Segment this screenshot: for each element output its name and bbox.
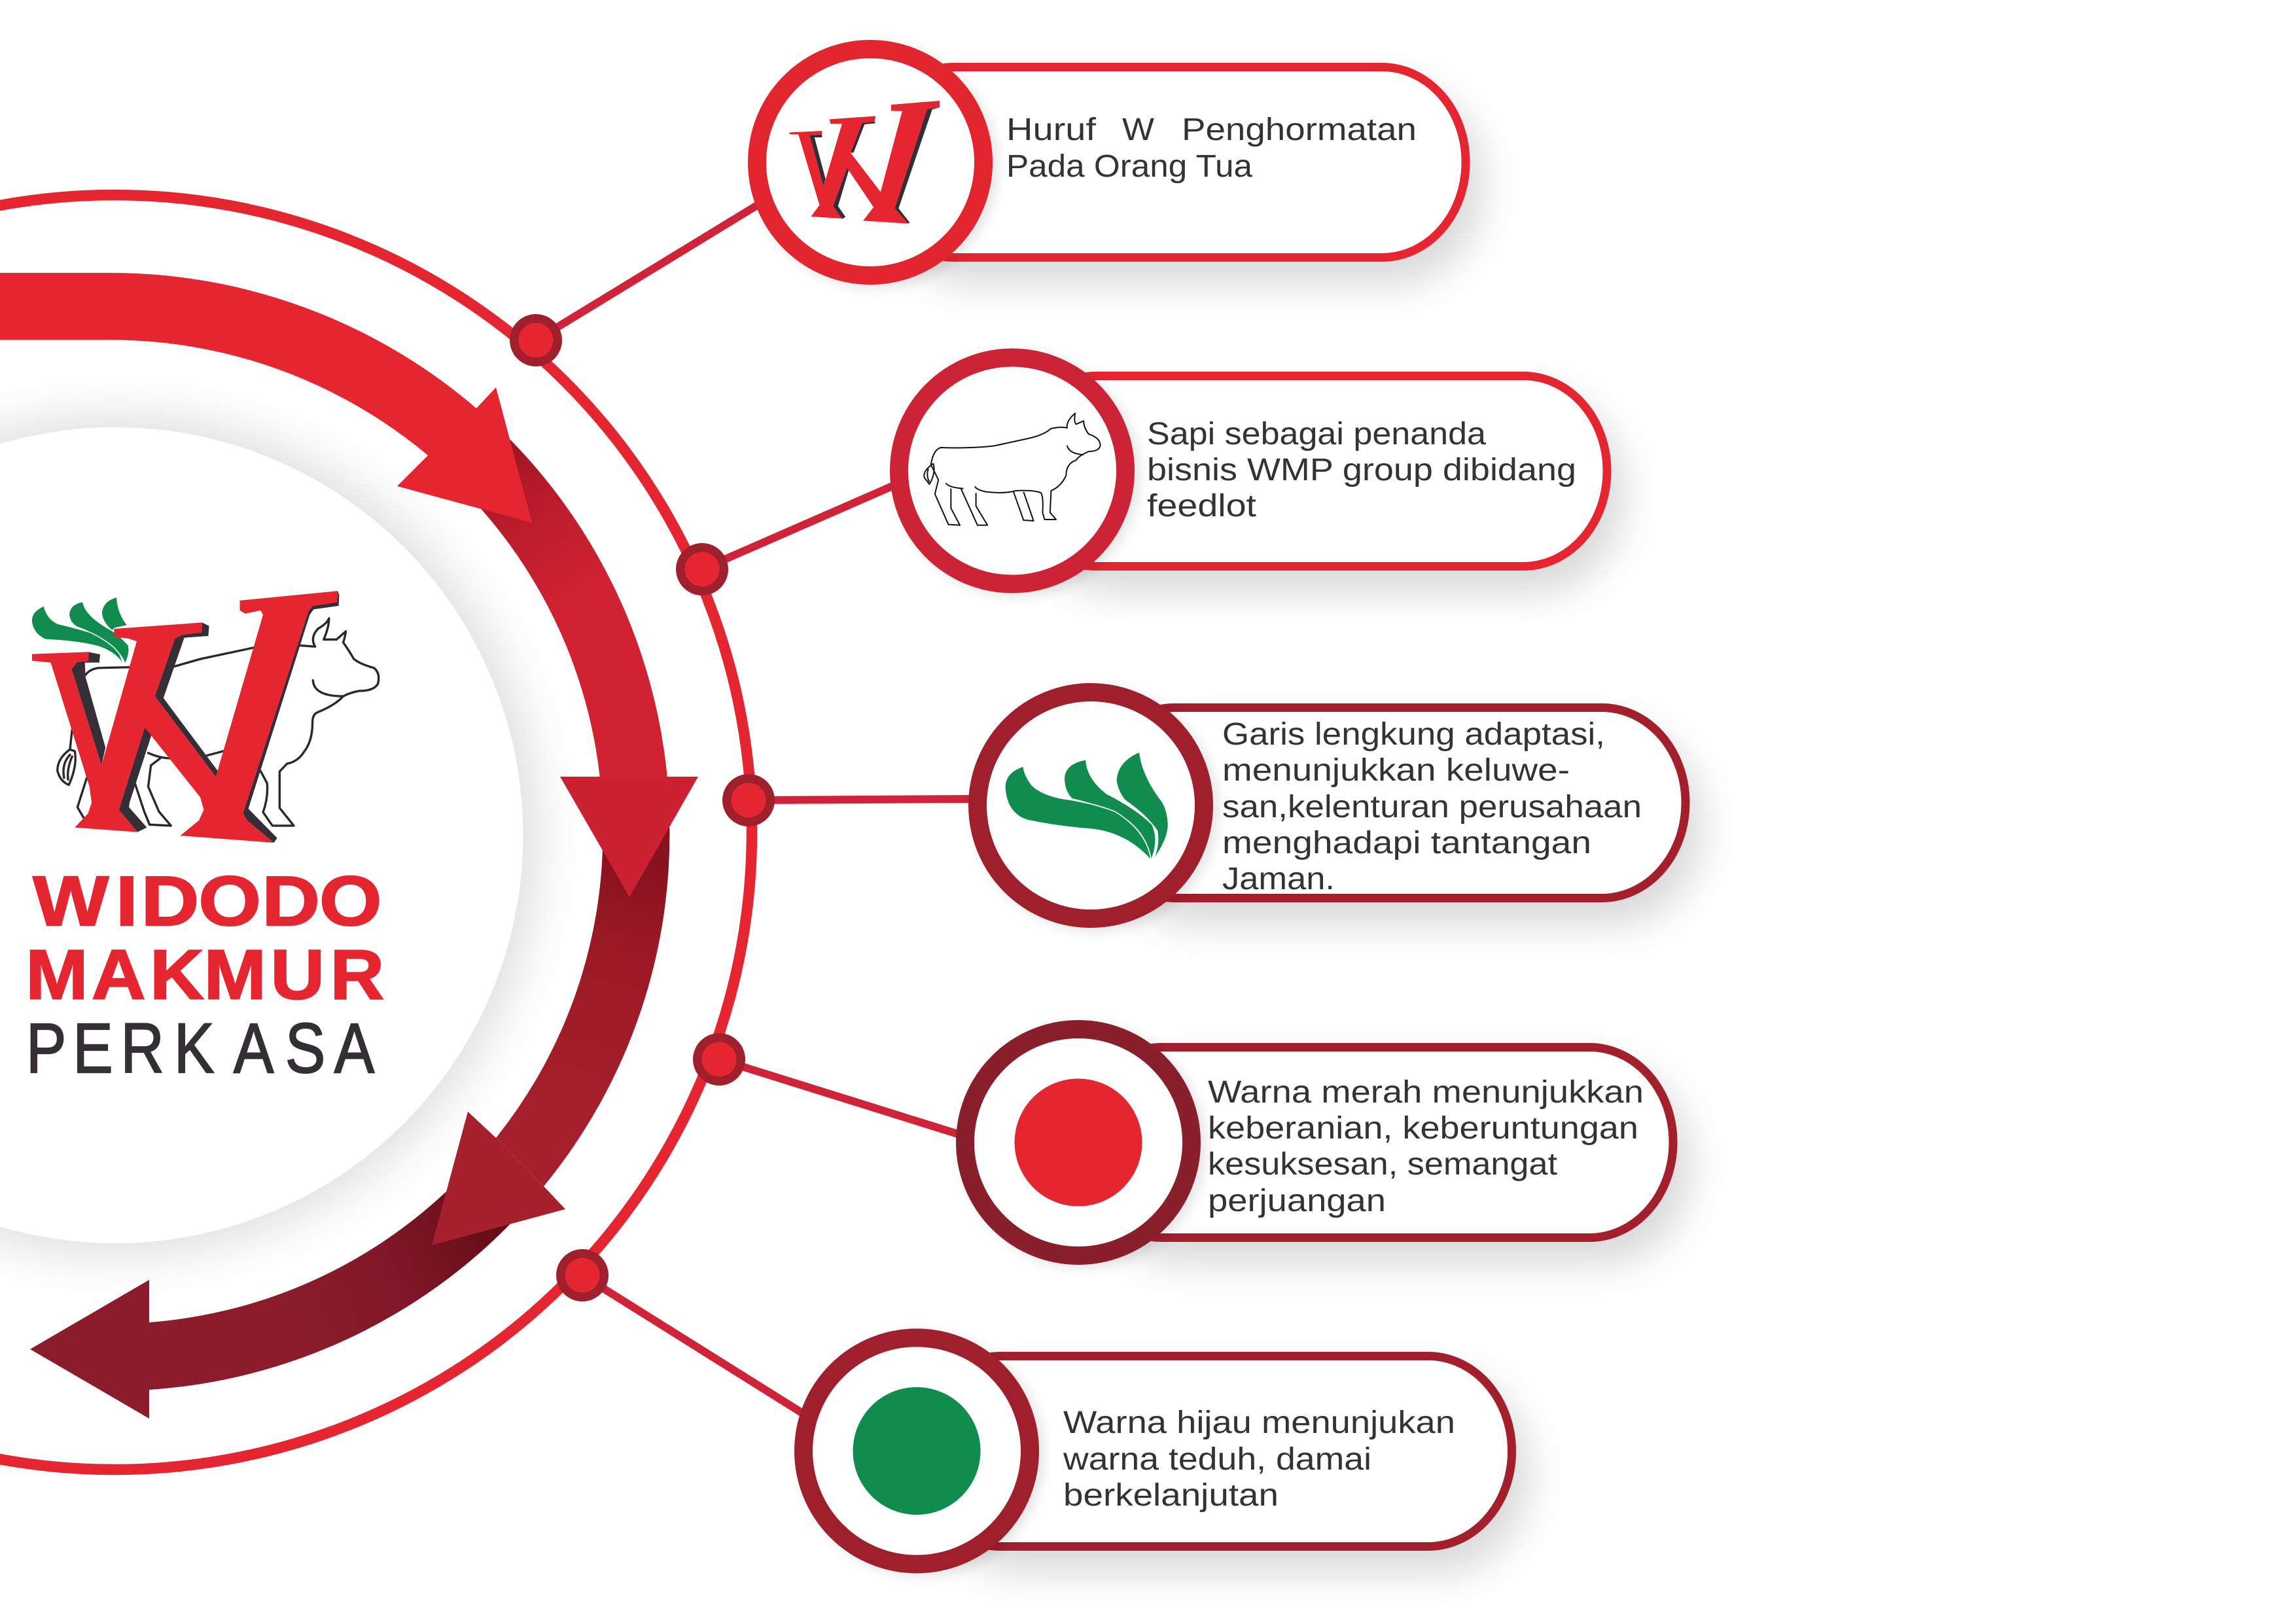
text: warna hijau: warna teduh, damai — [1063, 1442, 1371, 1477]
arrow segment 3 — [432, 818, 669, 1245]
text: warna hijau: Warna hijau menunjukan — [1063, 1405, 1455, 1440]
arrow segment 1 — [0, 273, 532, 523]
text: warna merah: Warna merah menunjukkan — [1208, 1075, 1644, 1110]
text: huruf W: W — [1122, 113, 1155, 147]
text: warna merah: perjuangan — [1208, 1184, 1386, 1218]
panel: warna hijau — [800, 1332, 1529, 1577]
icon: red dot — [1014, 1078, 1142, 1207]
text: warna merah: kesuksesan, semangat — [1208, 1147, 1557, 1182]
text: sapi: bisnis WMP group dibidang — [1147, 453, 1576, 487]
central white circle with soft shadow — [0, 414, 539, 1257]
text: garis lengkung: Garis lengkung adaptasi, — [1222, 717, 1605, 752]
panel: garis lengkung — [974, 687, 1703, 932]
text: warna hijau: berkelanjutan — [1063, 1478, 1279, 1513]
logo text: PERKASA: PERKASA — [26, 1009, 374, 1088]
logo text: MAKMUR: MAKMUR — [26, 934, 384, 1014]
text: sapi — [1147, 417, 1576, 523]
logo text: WIDODO: WIDODO — [33, 861, 382, 940]
circular arrow — [0, 273, 698, 1419]
connector lines — [536, 204, 975, 1415]
icon: green dot — [853, 1387, 980, 1515]
text: warna hijau — [1063, 1405, 1455, 1513]
text: huruf W: Pada Orang Tua — [1006, 149, 1252, 184]
outer ring — [0, 195, 752, 1470]
text: sapi: feedlot — [1147, 489, 1256, 523]
icon: letter W — [790, 101, 940, 224]
text: sapi: Sapi sebagai penanda — [1147, 417, 1486, 451]
text: huruf W — [1006, 113, 1417, 184]
text: warna merah — [1208, 1075, 1644, 1218]
arrow segment 4 — [30, 1192, 517, 1419]
ring nodes — [510, 314, 775, 1301]
arrow segment 2 — [478, 433, 698, 897]
logo icon: W, cow, leaves — [31, 591, 379, 843]
company logo — [26, 591, 384, 1088]
panel: huruf W — [753, 44, 1483, 289]
text: huruf W: Penghormatan — [1182, 113, 1417, 147]
text: garis lengkung: menunjukkan keluwe- — [1222, 753, 1570, 788]
icon: cow outline — [924, 414, 1100, 525]
panel: sapi — [895, 352, 1624, 597]
text: garis lengkung: san,kelenturan perusahaan — [1222, 790, 1642, 824]
text: warna merah: keberanian, keberuntungan — [1208, 1111, 1638, 1146]
text: garis lengkung: Jaman. — [1222, 862, 1335, 896]
text: garis lengkung — [1222, 717, 1642, 896]
text: garis lengkung: menghadapi tantangan — [1222, 826, 1591, 860]
text: huruf W: Huruf — [1006, 113, 1097, 147]
icon: green leaves — [1005, 752, 1168, 860]
panel: warna merah — [961, 1024, 1691, 1269]
